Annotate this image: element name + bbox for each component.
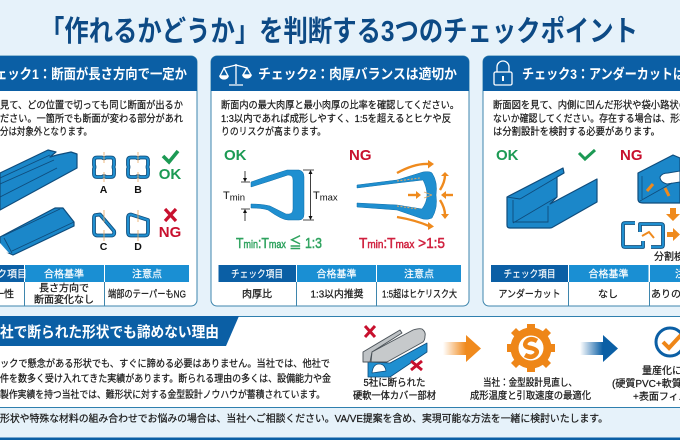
icon: balance scale xyxy=(220,64,251,85)
diagram: OK section: max xyxy=(320,192,338,204)
table: check 1: 注意点 xyxy=(132,268,162,280)
table: check 2: 合格基準 xyxy=(316,268,356,280)
table: check 2: 1:3以内推奨 xyxy=(310,288,364,300)
heading: check 2: チェック2：肉厚バランスは適切か xyxy=(258,66,457,82)
table: check 1 xyxy=(0,265,189,306)
illustration: open channel xyxy=(507,168,597,228)
text block: check 3 description: は分割設計を検討する必要があります。 xyxy=(493,125,660,138)
diagram: OK section: T xyxy=(223,190,230,202)
table: check 2 xyxy=(218,265,461,306)
text block: check 1 description: ださい。一箇所でも断面が変わる部分があれ xyxy=(0,112,183,125)
diagram: OK section: T xyxy=(313,190,320,202)
table: check 1: 長さ方向で xyxy=(39,282,89,294)
label: rejected: 5社に断られた xyxy=(364,376,426,389)
icon: cross-section D xyxy=(128,210,148,253)
table: check 1: 合格基準 xyxy=(44,268,84,280)
illustration: tapered profile xyxy=(0,208,74,255)
table: check 2: 1:5超はヒケリスク大 xyxy=(382,288,457,300)
label: our approach xyxy=(470,376,591,402)
text block: reason body: ックで懸念がある形状でも、すぐに諦める必要はありません。当社では、他社で xyxy=(0,357,330,370)
label: our approach: 当社：金型設計見直し、 xyxy=(483,376,577,389)
text block: check 2 description: 断面内の最大肉厚と最小肉厚の比率を確認してください。 xyxy=(221,98,459,112)
label: rejected: 硬軟一体カバー部材 xyxy=(353,389,436,402)
banner heading xyxy=(0,316,239,346)
diagram: OK section xyxy=(223,170,338,221)
formula: OK ratio: Tmin:Tmax ≦ 1:3 xyxy=(236,235,322,252)
text block: reason body xyxy=(0,357,331,401)
diagram: NG section xyxy=(357,160,453,230)
icon: cross-section B: B xyxy=(134,184,142,196)
table: check 3: チェック項目 xyxy=(504,268,556,280)
text block: check 2 description: りのリスクが高まります。 xyxy=(221,125,326,138)
table: check 3: 合格基準 xyxy=(588,268,628,280)
panel: check 2 xyxy=(211,56,469,306)
text block: check 1 description xyxy=(0,98,183,138)
table: check 1: 端部のテーパーもNG xyxy=(108,288,186,300)
text block: reason body: 製作実績を持つ当社では、難形状に対する金型設計ノウハウが蓄積されています。 xyxy=(0,388,325,401)
icon: cross NG xyxy=(165,209,176,221)
icon: cross bottom xyxy=(411,361,422,370)
table: check 3: なし xyxy=(598,288,618,300)
banner heading: 社で断られた形状でも諦めない理由 xyxy=(0,323,219,341)
illustration: straight channel profile xyxy=(0,150,77,210)
table: check 3: アンダーカット xyxy=(498,288,560,300)
footer note xyxy=(0,408,680,440)
icon: cross top xyxy=(365,326,375,337)
icon: cross-section C: C xyxy=(100,241,108,253)
illustration: undercut profile xyxy=(638,155,680,203)
arrow: blue xyxy=(580,335,618,362)
icon: check circle xyxy=(656,328,680,356)
diagram: OK section: min xyxy=(230,192,245,204)
table: check 1: 断面変化なし xyxy=(34,293,94,306)
text block: check 1 description: 見て、どの位置で切っても同じ断面が出るか xyxy=(0,98,183,112)
icon: gear xyxy=(507,324,555,372)
arrow: right xyxy=(667,228,680,241)
icon: padlock xyxy=(494,61,512,85)
text block: check 2 description: 1:3以内であれば成形しやすく、1:5を超えるとヒケや反 xyxy=(221,112,451,125)
label: rejected xyxy=(353,376,436,402)
icon: cross-section B xyxy=(128,152,148,196)
formula: NG ratio: Tmin:Tmax >1:5 xyxy=(359,235,445,252)
icon: cross-section D: D xyxy=(134,241,142,253)
label: NG: NG xyxy=(159,224,181,241)
label: our approach: 成形温度と引取速度の最適化 xyxy=(470,389,591,402)
label: result xyxy=(612,364,680,403)
heading: check 1: ェック1：断面が長さ方向で一定か xyxy=(0,66,187,82)
label: OK: OK xyxy=(224,147,247,164)
text block: check 3 description xyxy=(493,98,680,138)
illustration: rejected profile xyxy=(363,329,427,377)
text block: reason body: 件を数多く受け入れてきた実績があります。断られる理由の多くは、設備能力や金 xyxy=(0,372,331,385)
icon: cross-section C xyxy=(94,210,114,253)
table: check 2: 肉厚比 xyxy=(242,288,272,300)
panel: check 3 xyxy=(483,56,680,306)
label: OK: OK xyxy=(159,166,181,183)
text block: check 1 description: 分は対象外となります。 xyxy=(0,125,92,138)
icon: cross-section A: A xyxy=(100,184,108,196)
table: check 3 xyxy=(491,265,680,306)
table: check 2: チェック項目 xyxy=(231,268,283,280)
label: NG: NG xyxy=(349,147,372,164)
arrow: down xyxy=(666,208,680,221)
icon: cross-section A xyxy=(94,152,114,196)
text block: check 2 description xyxy=(221,98,459,138)
icon: check mark xyxy=(579,150,595,159)
icon: check mark OK xyxy=(163,151,178,162)
arrow: orange xyxy=(443,335,481,362)
panel: reason section xyxy=(0,316,680,408)
footer note: 形状や特殊な材料の組み合わせでお悩みの場合は、当社へご相談ください。VA/VE提案を含め、実現可能な方法を一緒に検討いたします。 xyxy=(0,412,608,425)
label: NG: NG xyxy=(620,147,642,164)
illustration: split parts xyxy=(623,223,663,247)
panel: check 1 xyxy=(0,56,197,306)
label: OK: OK xyxy=(496,147,519,164)
table: check 2: 注意点 xyxy=(404,268,434,280)
